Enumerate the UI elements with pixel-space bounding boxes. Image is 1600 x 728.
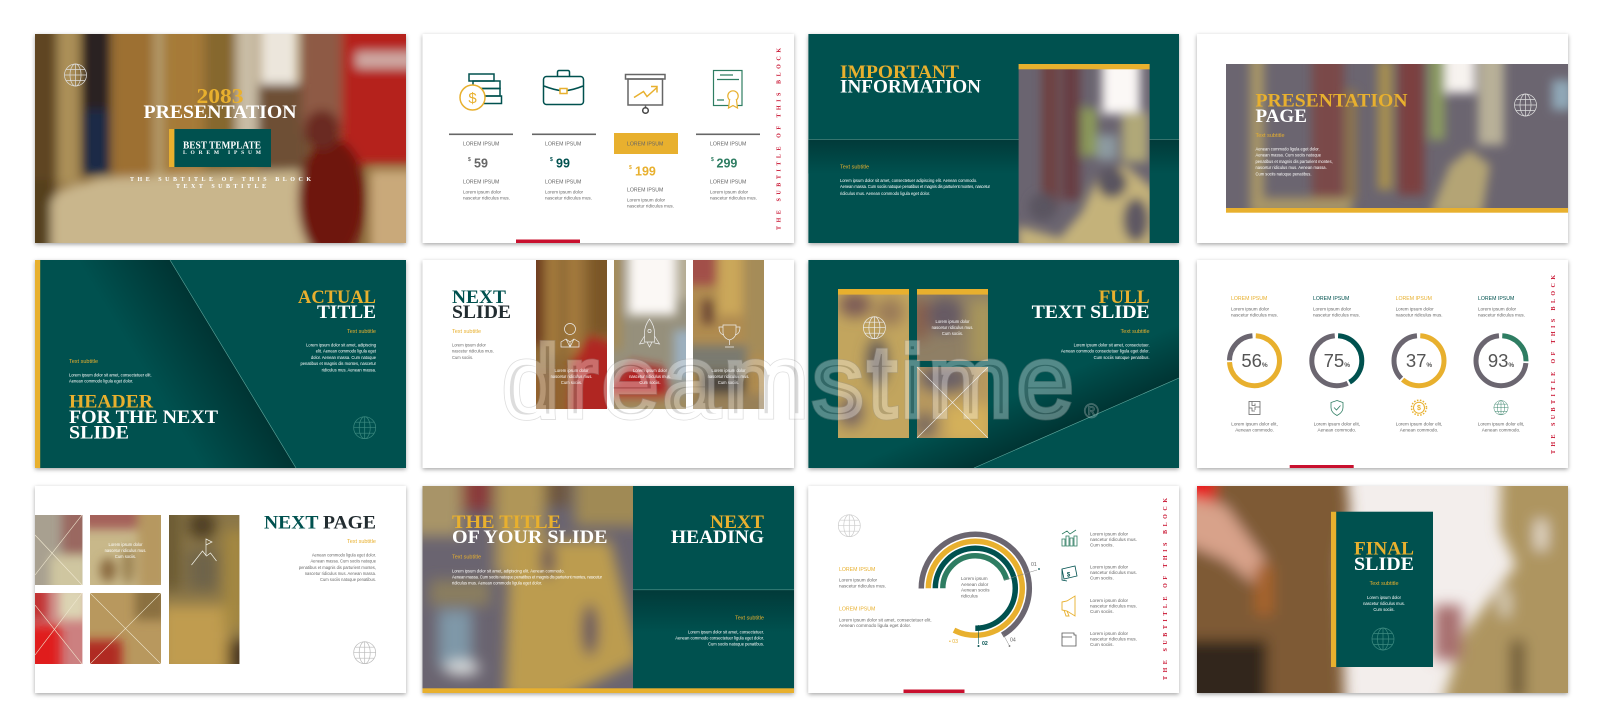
- left text block: Text subtitle: [69, 359, 98, 365]
- icon: globe: [838, 515, 860, 537]
- icon: maze: [1249, 402, 1260, 414]
- watermark: ®: [1084, 401, 1099, 423]
- title: [1032, 287, 1150, 323]
- right text block: Cum sociis natoque penatibus.: [708, 642, 764, 646]
- photo 1 with person icon: [536, 260, 607, 409]
- chart callouts: 01: [1031, 562, 1037, 568]
- text block: nascetur ridiculus mus. Aenean massa.: [305, 571, 376, 576]
- left text block: [452, 554, 603, 586]
- icon: megaphone: [1062, 596, 1075, 616]
- photo: [1226, 64, 1568, 208]
- photo grid: Lorem ipsum dolor: [109, 542, 143, 547]
- statistic column 56%: Lorem ipsum dolor elit,: [1231, 422, 1278, 426]
- final panel: nascetur ridiculus mus.: [1363, 601, 1405, 606]
- final panel: Lorem ipsum dolor: [1367, 595, 1402, 600]
- pricing column 3, highlighted: LOREM IPSUM: [627, 142, 663, 148]
- left heading: HEADER: [69, 392, 153, 412]
- list item 1 text: [1090, 532, 1137, 548]
- right text block: [675, 616, 764, 646]
- title: NEXT PAGE: [264, 512, 376, 534]
- pricing column 1: Lorem ipsum dolor: [463, 190, 502, 194]
- left text block: Aenean commodo ligula eget dolor.: [69, 379, 133, 384]
- slide 12: final slide: [1194, 484, 1571, 698]
- chart centre text: [961, 576, 990, 598]
- photo top bar: [1019, 64, 1150, 69]
- chart callouts: 04: [1010, 638, 1016, 644]
- text block: Text subtitle: [1121, 329, 1150, 335]
- text block: ridiculus mus. Aenean commodo ligula eget dolor.: [840, 191, 930, 196]
- photo 2 with rocket icon: Cum sociis.: [639, 380, 661, 385]
- left title: THE TITLE: [452, 512, 561, 533]
- list item 3 text: [1090, 598, 1137, 614]
- left text block: ridiculus mus. Aenean commodo ligula eget dolor.: [452, 580, 542, 586]
- pricing column 1: [449, 134, 513, 200]
- text block: Text subtitle: [840, 164, 869, 170]
- icon: globe: [354, 642, 376, 664]
- list item 2 text: [1090, 564, 1137, 581]
- icon: money: $: [1067, 572, 1071, 578]
- right heading: [671, 512, 764, 548]
- statistic column 75%: nascetur ridiculus mus.: [1313, 312, 1360, 318]
- radial arc chart: [921, 534, 1029, 642]
- pricing column 1: $: [468, 157, 471, 163]
- statistic column 56%: LOREM IPSUM: [1231, 296, 1267, 302]
- photo 2 with rocket icon: [614, 260, 686, 409]
- pricing column 1: nascetur ridiculus mus.: [463, 196, 510, 200]
- title: [452, 287, 511, 323]
- slide 6: next slide: [422, 240, 794, 468]
- icon: globe: [64, 64, 86, 86]
- chart callouts: • 03: [949, 639, 958, 645]
- statistic column 56%: nascetur ridiculus mus.: [1231, 312, 1278, 318]
- title: SLIDE: [452, 302, 511, 323]
- statistic column 37%: [1394, 296, 1444, 432]
- title: NEXT: [452, 287, 506, 308]
- slide 5: actual title: [35, 260, 406, 468]
- list item 2 text: nascetur ridiculus mus.: [1090, 570, 1137, 575]
- photo grid: [35, 515, 240, 664]
- list item 2 text: Cum sociis.: [1090, 576, 1114, 581]
- left text block: Lorem ipsum dolor sit amet, consectetuer elit.: [69, 373, 152, 378]
- statistic column 75%: [1312, 296, 1362, 432]
- slide 3: important information: [808, 34, 1179, 255]
- left text blocks: nascetur ridiculus mus.: [839, 584, 886, 588]
- final panel: [1331, 512, 1433, 667]
- bottom bar: [422, 688, 794, 693]
- slide 2: pricing: [422, 34, 794, 243]
- title: IMPORTANT: [840, 62, 959, 83]
- photo: [422, 486, 633, 688]
- list item 4 text: Cum sociis.: [1090, 642, 1114, 647]
- red accent bar: [1290, 465, 1354, 468]
- statistic column 75%: Lorem ipsum dolor elit,: [1314, 422, 1360, 426]
- photo: [1018, 64, 1150, 243]
- photo with cross placeholder lines: [916, 366, 988, 438]
- statistic column 75%: Aenean commodo.: [1318, 428, 1356, 432]
- text block: nascetur ridiculus mus. Aenean massa.: [1256, 165, 1327, 170]
- icon: coins: $: [468, 90, 477, 107]
- pricing column 3, highlighted: nascetur ridiculus mus.: [627, 204, 674, 208]
- vertical subtitle: THE SUBTITLE OF THIS BLOCK: [776, 48, 782, 230]
- photo 2 with rocket icon: Lorem ipsum dolor: [633, 368, 668, 373]
- chart centre text: Aenean sociis: [961, 588, 990, 593]
- icon: presentation board: [626, 74, 665, 113]
- list item 3 text: nascetur ridiculus mus.: [1090, 604, 1137, 608]
- left text blocks: Lorem ipsum dolor sit amet, consectetuer elit.: [839, 618, 932, 622]
- left text block: Lorem ipsum dolor sit amet, adipiscing elit. Aenean commodo.: [452, 568, 565, 574]
- left text blocks: Lorem ipsum dolor: [839, 578, 878, 582]
- icon: small globe: [1494, 401, 1508, 415]
- statistic column 93%: LOREM IPSUM: [1478, 296, 1514, 302]
- title: FULL: [1099, 287, 1150, 308]
- statistic column 93%: Lorem ipsum dolor: [1478, 306, 1517, 312]
- left heading: [69, 392, 218, 444]
- statistic column 56%: Lorem ipsum dolor: [1231, 306, 1270, 312]
- text block: Aenean massa. Cum sociis natoque: [310, 559, 377, 564]
- pricing column 3, highlighted: [614, 133, 678, 208]
- slide 4: presentation page: [1197, 34, 1572, 243]
- pricing column 1: LOREM IPSUM: [463, 142, 499, 148]
- photo 3 with trophy icon: [693, 260, 764, 409]
- text block: [840, 164, 991, 196]
- statistic column 93%: Aenean commodo.: [1482, 428, 1520, 432]
- teal label box: BEST TEMPLATE: [183, 140, 261, 152]
- list item 2 text: Lorem ipsum dolor: [1090, 564, 1129, 570]
- photo 1 with person icon: nascetur ridiculus mus.: [551, 374, 592, 379]
- red accent bar: [904, 690, 964, 693]
- statistic column 75%: LOREM IPSUM: [1313, 296, 1349, 302]
- pricing column 4: LOREM IPSUM: [710, 180, 746, 186]
- photo grid: nascetur ridiculus mus.: [105, 548, 146, 553]
- pricing column 2: $: [550, 157, 553, 163]
- title: [840, 62, 981, 98]
- photo 1 with person icon: Lorem ipsum dolor: [555, 368, 589, 373]
- right heading: HEADING: [671, 527, 764, 548]
- photo bottom bar: [1226, 208, 1568, 213]
- cover title: 2083: [196, 84, 244, 108]
- title: [1256, 90, 1408, 127]
- chart centre text: Lorem ipsum: [961, 576, 988, 581]
- text block: Aenean commodo consectetuer ligula eget dolor.: [1061, 349, 1150, 354]
- icon: chart: [1062, 530, 1077, 546]
- statistic column 93%: [1476, 296, 1526, 432]
- right title: TITLE: [317, 302, 376, 323]
- icon: folder: [1062, 633, 1076, 646]
- slide 7: full text slide: [808, 260, 1179, 468]
- text block: Cum sociis natoque penatibus.: [1094, 355, 1150, 360]
- statistic column 56%: 56%: [1241, 350, 1268, 371]
- pricing column 4: $: [711, 157, 714, 163]
- pricing column 3, highlighted: $: [629, 165, 632, 171]
- text block: Aenean massa. Cum sociis natoque: [1256, 153, 1322, 158]
- text block: Aenean commodo ligula eget dolor.: [1256, 146, 1320, 152]
- chart callouts: [949, 562, 1040, 647]
- text block: Aenean commodo ligula eget dolor.: [312, 552, 376, 558]
- chart centre text: ridiculus: [961, 593, 979, 598]
- icon: globe: [1514, 94, 1536, 116]
- icon: shield: [1331, 400, 1343, 416]
- teal label box: LOREM IPSUM: [183, 150, 262, 156]
- photo 3 with trophy icon: Lorem ipsum dolor: [712, 368, 746, 373]
- slide 9: next page: [25, 486, 406, 693]
- list item 3 text: Lorem ipsum dolor: [1090, 598, 1129, 603]
- red accent bar: [516, 240, 580, 243]
- vertical subtitle: THE SUBTITLE OF THIS BLOCK: [1163, 498, 1169, 680]
- text block: Aenean massa. Cum sociis natoque penatibus et magnis dis parturient montes, nascetur: [840, 184, 991, 189]
- left text block: [69, 359, 152, 384]
- text block: [1061, 329, 1150, 360]
- statistic column 37%: 37%: [1406, 350, 1432, 371]
- text block: Cum sociis natoque penatibus.: [320, 577, 376, 582]
- pricing column 4: LOREM IPSUM: [710, 142, 746, 148]
- text block: penatibus et magnis dis parturient montes,: [299, 565, 376, 570]
- statistic column 56%: Aenean commodo.: [1235, 428, 1274, 432]
- pricing column 2: 99: [556, 156, 570, 170]
- right text block: Lorem ipsum dolor sit amet, consectetuer.: [688, 630, 764, 634]
- pricing column 4: Lorem ipsum dolor: [710, 190, 749, 194]
- list item 4 text: Lorem ipsum dolor: [1090, 631, 1129, 636]
- photo 3 with trophy icon: nascetur ridiculus mus.: [708, 374, 749, 379]
- icon: money: [1062, 566, 1077, 581]
- pricing column 2: LOREM IPSUM: [545, 142, 581, 148]
- pricing column 3, highlighted: 199: [635, 164, 656, 178]
- right text block: ridiculus mus. Aenean massa.: [322, 367, 376, 372]
- statistic column 93%: nascetur ridiculus mus.: [1478, 312, 1525, 318]
- list item 1 text: Cum sociis.: [1090, 543, 1114, 548]
- photo with caption: Cum sociis.: [942, 331, 963, 336]
- photo grid: Cum sociis.: [115, 554, 136, 559]
- left heading: FOR THE NEXT: [69, 407, 218, 428]
- right text block: Text subtitle: [735, 616, 764, 622]
- title: TEXT SLIDE: [1032, 302, 1150, 323]
- text block: Text subtitle: [347, 539, 376, 545]
- pricing column 2: [532, 134, 596, 200]
- text block: Text subtitle: [452, 329, 481, 335]
- right text block: Aenean commodo consectetuer ligula eget dolor.: [675, 636, 764, 640]
- list item 4 text: nascetur ridiculus mus.: [1090, 636, 1137, 642]
- slide 11: radial chart: [808, 486, 1179, 693]
- photo tall with globe: [838, 289, 909, 438]
- text block: Lorem ipsum dolor sit amet, consectetuer adipiscing elit. Aenean commodo.: [840, 178, 977, 183]
- statistic column 37%: LOREM IPSUM: [1396, 296, 1432, 302]
- list item 4 text: [1090, 631, 1137, 647]
- slide 1: cover photo: [32, 32, 409, 248]
- text block: [299, 539, 377, 582]
- chart callouts: 02: [982, 641, 988, 647]
- left text block: Aenean massa. Cum sociis natoque penatibus et magnis dis parturient montes, nascetur: [452, 574, 603, 580]
- pricing column 4: [696, 134, 760, 200]
- statistic column 75%: Lorem ipsum dolor: [1313, 306, 1352, 312]
- text block: [452, 329, 494, 360]
- statistic column 56%: [1230, 296, 1280, 432]
- photo 3 with trophy icon: Cum sociis.: [718, 380, 739, 385]
- left title: OF YOUR SLIDE: [452, 527, 608, 548]
- list item 1 text: Lorem ipsum dolor: [1090, 532, 1129, 536]
- icon: globe: [354, 417, 376, 439]
- left title: [452, 512, 608, 548]
- cover title: [144, 84, 297, 123]
- photo with caption: nascetur ridiculus mus.: [932, 325, 973, 330]
- cover subtitle: [130, 177, 311, 190]
- left text blocks: Aenean commodo ligula eget dolor.: [839, 623, 911, 628]
- watermark: dreamstime: [503, 326, 1073, 438]
- final panel: FINAL: [1354, 538, 1414, 560]
- left text blocks: [839, 567, 932, 628]
- teal label box: [169, 129, 271, 167]
- pricing column 1: 59: [474, 156, 488, 170]
- right text block: Text subtitle: [347, 329, 376, 335]
- statistic column 93%: 93%: [1488, 350, 1514, 371]
- title: PAGE: [1256, 106, 1307, 127]
- pricing column 3, highlighted: LOREM IPSUM: [627, 188, 663, 194]
- vertical subtitle: THE SUBTITLE OF THIS BLOCK: [1551, 275, 1557, 454]
- pricing column 4: 299: [716, 156, 737, 170]
- text block: Lorem ipsum dolor sit amet, consectetuer.: [1074, 342, 1150, 348]
- pricing column 2: LOREM IPSUM: [545, 180, 581, 186]
- statistic column 93%: Lorem ipsum dolor elit,: [1478, 422, 1524, 426]
- statistic column 37%: nascetur ridiculus mus.: [1396, 312, 1443, 318]
- left text blocks: LOREM IPSUM: [839, 606, 875, 612]
- pricing column 1: LOREM IPSUM: [463, 180, 499, 186]
- watermark: dreamstime: [503, 326, 1073, 438]
- photo with caption: [917, 289, 988, 361]
- list item 1 text: nascetur ridiculus mus.: [1090, 537, 1137, 542]
- photo 1 with person icon: Cum sociis.: [561, 380, 582, 385]
- right text block: elit. Aenean commodo ligula eget: [316, 349, 377, 354]
- left text block: Text subtitle: [452, 554, 481, 560]
- right title: [298, 287, 376, 323]
- icon: coins: [460, 74, 502, 110]
- text block: Text subtitle: [1256, 133, 1285, 139]
- photo with caption: Lorem ipsum dolor: [936, 319, 970, 324]
- title: PRESENTATION: [1256, 90, 1408, 112]
- right text block: Lorem ipsum dolor sit amet, adipiscing: [306, 342, 377, 348]
- left text blocks: LOREM IPSUM: [839, 567, 875, 573]
- title: INFORMATION: [840, 76, 981, 98]
- final panel: Cum sociis.: [1373, 607, 1395, 612]
- text block: Cum sociis.: [452, 355, 473, 360]
- pricing column 2: nascetur ridiculus mus.: [545, 196, 592, 200]
- cover title: PRESENTATION: [144, 102, 297, 123]
- chart centre text: Aenean dolor: [961, 582, 989, 587]
- statistic column 37%: Aenean commodo.: [1400, 428, 1438, 432]
- list item 3 text: Cum sociis.: [1090, 609, 1114, 614]
- statistic column 75%: 75%: [1324, 350, 1350, 371]
- pricing column 2: Lorem ipsum dolor: [545, 190, 584, 194]
- icon: briefcase: [544, 70, 584, 104]
- final panel: SLIDE: [1354, 554, 1414, 575]
- slide 10: title of your slide: [420, 484, 797, 698]
- statistic column 37%: Lorem ipsum dolor elit,: [1396, 422, 1442, 426]
- right text block: [300, 329, 377, 372]
- statistic column 37%: Lorem ipsum dolor: [1396, 306, 1434, 312]
- right heading: NEXT: [710, 512, 764, 533]
- final panel: Text subtitle: [1369, 581, 1399, 587]
- slide 8: donut statistics: [1197, 260, 1568, 468]
- pricing column 3, highlighted: Lorem ipsum dolor: [627, 198, 666, 202]
- cover subtitle: THE SUBTITLE OF THIS BLOCK: [130, 177, 311, 183]
- text block: penatibus et magnis dis parturient montes,: [1256, 159, 1333, 164]
- text block: Cum sociis natoque penatibus.: [1256, 172, 1311, 176]
- right title: ACTUAL: [298, 287, 376, 308]
- text block: Lorem ipsum dolor: [452, 342, 487, 348]
- icon: certificate: [714, 70, 742, 108]
- right text block: penatibus et magnis dis montes, nascetur: [300, 361, 377, 366]
- text block: nascetur ridiculus mus.: [452, 349, 494, 354]
- cover subtitle: TEXT SUBTITLE: [176, 184, 266, 190]
- photo 2 with rocket icon: nascetur ridiculus mus.: [629, 374, 671, 379]
- icon: coin gear: $: [1417, 405, 1421, 412]
- right text block: dolor. Aenean massa. Cum natoque: [311, 355, 377, 360]
- pricing column 4: nascetur ridiculus mus.: [710, 196, 757, 200]
- text block: [1256, 133, 1333, 176]
- left heading: SLIDE: [69, 422, 129, 444]
